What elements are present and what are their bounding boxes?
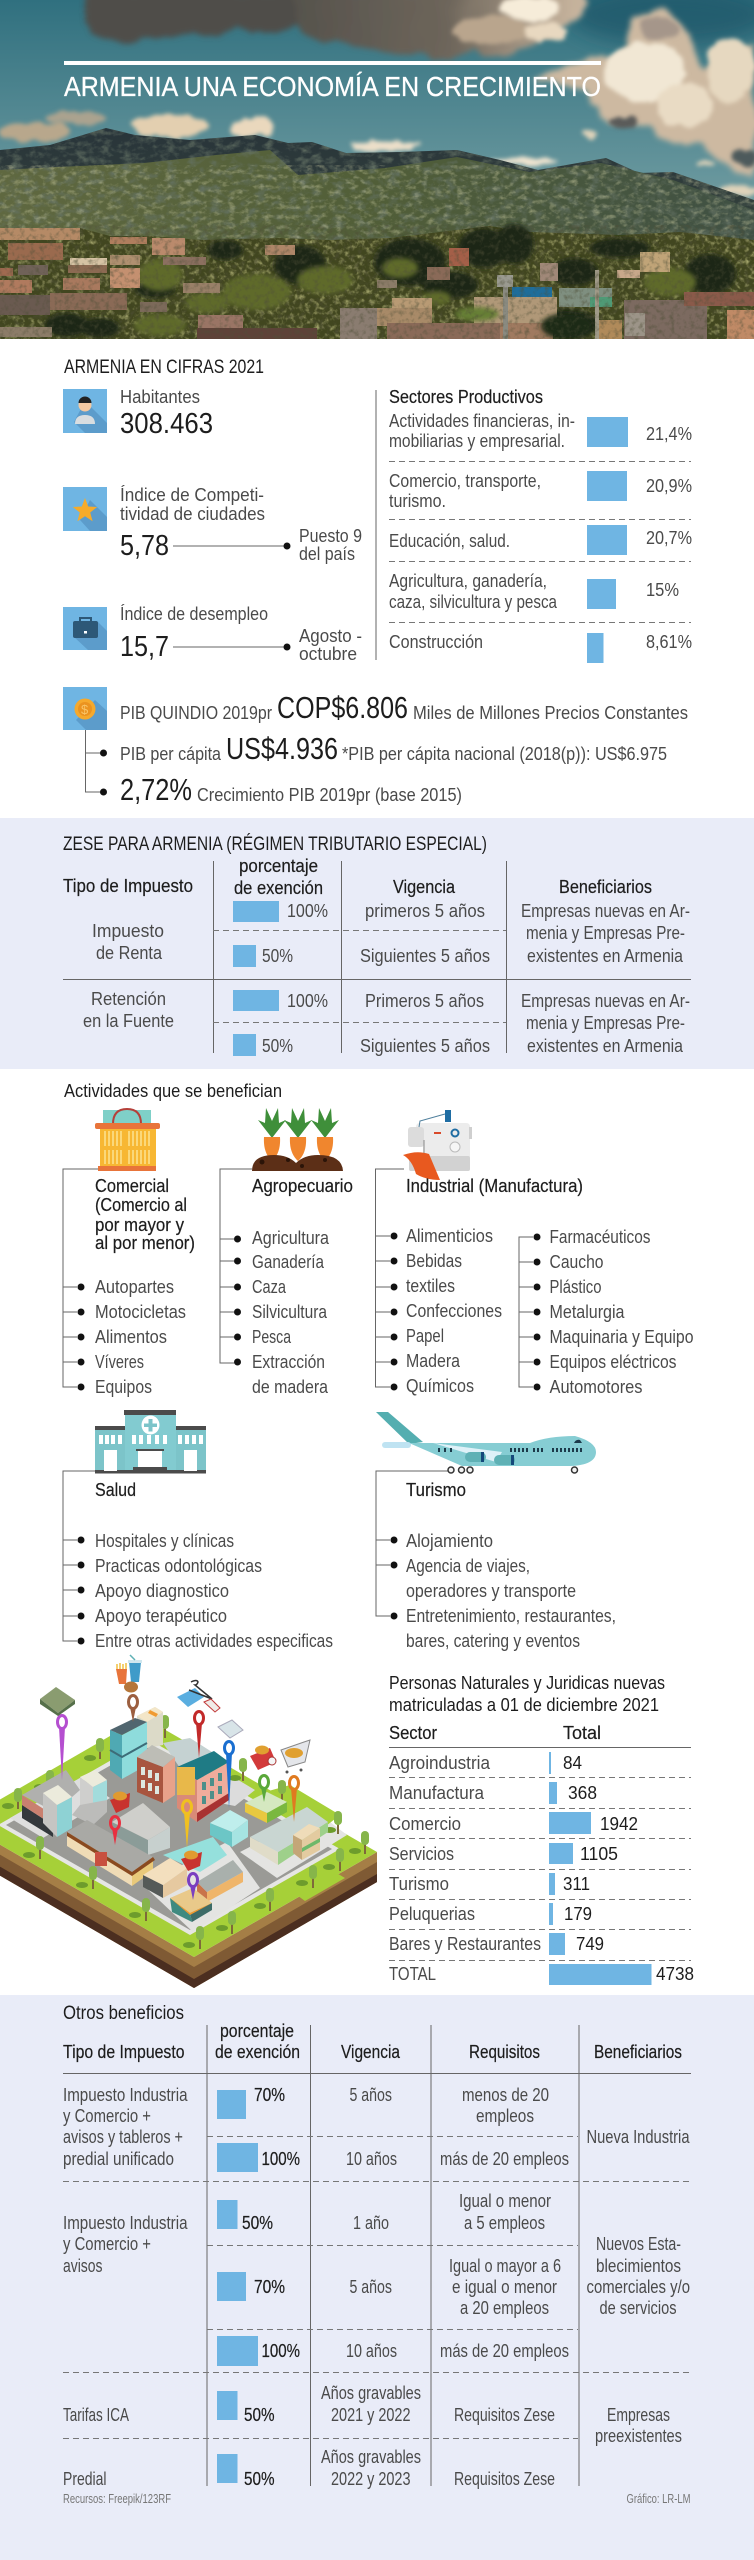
stat: índice de competitividad: tividad de ciudades (120, 504, 265, 524)
rows: Peluquerias (389, 1904, 475, 1924)
panel: turismo: Entretenimiento, restaurantes, (406, 1606, 616, 1626)
table header: Requisitos (469, 2042, 540, 2062)
row group: nuevos establecimientos: comerciales y/o (586, 2277, 690, 2297)
row: impuesto de renta (92, 901, 690, 967)
row group: nueva industria: más de 20 empleos (440, 2149, 569, 2169)
sector row: financieras: 21,4% (646, 424, 692, 444)
panel: industrial: Bebidas (406, 1251, 462, 1271)
sector row: construcción: 8,61% (646, 632, 692, 652)
icon: coin: $ (81, 702, 89, 717)
rows: Agroindustria (389, 1753, 491, 1773)
panel: industrial: Automotores (550, 1377, 642, 1397)
sector row: comercio: Comercio, transporte, (389, 471, 541, 491)
panel: otros beneficios (0, 1995, 754, 2560)
stat block: PIB: US$4.936 (226, 731, 338, 766)
back long roof (163, 1738, 212, 1768)
sector row: comercio: turismo. (389, 491, 446, 511)
credits: Gráfico: LR-LM (626, 2491, 690, 2506)
panel: agropecuario (220, 1108, 353, 1397)
buildings right (377, 248, 754, 339)
row: impuesto de renta: existentes en Armenia (527, 946, 684, 966)
credits: Recursos: Freepik/123RF (63, 2491, 171, 2506)
stat: habitantes (63, 387, 213, 440)
stat: índice de desempleo: 15,7 (120, 631, 169, 663)
panel: ZESE para Armenia: ZESE PARA ARMENIA (RÉGIMEN TRIBUTARIO ESPECIAL) (63, 834, 487, 855)
row group: empresas preexistentes (63, 2383, 682, 2489)
mountains (0, 128, 754, 240)
row group: nueva industria: predial unificado (63, 2149, 174, 2169)
floating icons: money, food, clothes, baskets, cart (40, 1655, 310, 1871)
panel: agropecuario: Agricultura (252, 1228, 330, 1248)
icon: basket (95, 1109, 160, 1171)
icon: coin (63, 687, 107, 730)
soil block (0, 1822, 377, 1988)
panel: industrial: Alimenticios (406, 1226, 493, 1246)
table: personas naturales y jurídicas: Personas Naturales y Juridicas nuevas (389, 1673, 665, 1693)
credits (63, 2491, 690, 2506)
panel: turismo: Turismo (406, 1480, 466, 1500)
rows: 1942 (600, 1814, 638, 1834)
row group: nuevos establecimientos: 70% (254, 2277, 285, 2297)
panel: industrial: Químicos (406, 1376, 474, 1396)
panel: salud: Hospitales y clínicas (95, 1531, 234, 1551)
stat block: PIB: Miles de Millones Precios Constantes (413, 703, 688, 723)
row: impuesto de renta: de Renta (96, 943, 163, 963)
sector row: financieras: Actividades financieras, in- (389, 411, 575, 431)
rows: 84 (563, 1753, 582, 1773)
sector row: comercio: 20,9% (646, 476, 692, 496)
icon: hospital (95, 1410, 206, 1474)
buildings (22, 1707, 328, 1922)
row group: empresas preexistentes: Empresas (607, 2405, 670, 2425)
row group: nueva industria: avisos y tableros + (63, 2127, 183, 2147)
panel: agropecuario: Caza (252, 1277, 287, 1297)
title rule and headline (64, 61, 601, 102)
stat: habitantes: Habitantes (120, 387, 200, 407)
row group: empresas preexistentes: Requisitos Zese (454, 2405, 555, 2425)
sector row: agricultura: caza, silvicultura y pesca (389, 592, 558, 612)
row group: nueva industria: 5 años (350, 2085, 392, 2105)
table header: Vigencia (341, 2042, 401, 2062)
row group: empresas preexistentes: 50% (244, 2405, 274, 2425)
table header: Tipo de Impuesto (63, 2042, 184, 2062)
rows: 749 (576, 1934, 604, 1954)
table header: Beneficiarios (594, 2042, 682, 2062)
sector row: construcción (389, 632, 692, 663)
brick building (137, 1745, 175, 1803)
panel: industrial: Caucho (550, 1252, 604, 1272)
icon: person (63, 389, 107, 433)
row group: empresas preexistentes: Años gravables (321, 2383, 421, 2403)
rows: Bares y Restaurantes (389, 1934, 541, 1954)
row group: nueva industria: 100% (262, 2149, 300, 2169)
table header (63, 856, 652, 898)
panel: sectores productivos (376, 387, 692, 663)
table header: Beneficiarios (559, 877, 652, 897)
panel: comercial (63, 1109, 195, 1397)
panel: turismo: Alojamiento (406, 1531, 493, 1551)
right complex (250, 1807, 328, 1865)
row group: nuevos establecimientos: Igual o mayor a 6 (449, 2256, 561, 2276)
panel: industrial: Madera (406, 1351, 461, 1371)
shopping centre (67, 1820, 155, 1886)
rows: 368 (568, 1783, 597, 1803)
rows: 311 (563, 1874, 590, 1894)
row: retención en la fuente: Retención (91, 989, 166, 1009)
panel: comercial: Motocicletas (95, 1302, 186, 1322)
row group: nuevos establecimientos: 1 año (353, 2213, 389, 2233)
panel: salud: Practicas odontológicas (95, 1556, 262, 1576)
panel: comercial: Alimentos (95, 1327, 167, 1347)
section heading: actividades: Actividades que se benefician (64, 1081, 282, 1101)
table: personas naturales y jurídicas (389, 1673, 694, 1985)
stat: índice de competitividad: Índice de Competi- (120, 485, 264, 505)
panel: turismo: operadores y transporte (406, 1581, 576, 1601)
row group: nuevos establecimientos: 5 años (350, 2277, 392, 2297)
row: retención en la fuente: Empresas nuevas en Ar- (521, 991, 690, 1011)
panel: salud: Salud (95, 1480, 136, 1500)
table header: Vigencia (393, 877, 456, 897)
sector row: agricultura (389, 571, 679, 612)
row group: nuevos establecimientos: 50% (242, 2213, 273, 2233)
icon: carrots (252, 1108, 343, 1171)
stat: índice de competitividad: del país (299, 544, 355, 564)
row group: nuevos establecimientos: Nuevos Esta- (596, 2234, 681, 2254)
panel: salud: Apoyo diagnostico (95, 1581, 229, 1601)
panel: comercial: por mayor y (95, 1215, 184, 1235)
row group: nuevos establecimientos (63, 2191, 690, 2366)
row: retención en la fuente: Primeros 5 años (365, 991, 484, 1011)
row: retención en la fuente (83, 989, 690, 1056)
row group: nueva industria: Impuesto Industria (63, 2085, 188, 2105)
panel: agropecuario: Pesca (252, 1327, 292, 1347)
sector row: educación: Educación, salud. (389, 531, 510, 551)
panel: industrial: Plástico (550, 1277, 602, 1297)
row group: nuevos establecimientos: e igual o menor (452, 2277, 557, 2297)
panel: agropecuario: Agropecuario (252, 1176, 353, 1196)
trees (2, 1715, 369, 1949)
icon: briefcase (63, 607, 107, 650)
rows: 1105 (580, 1844, 618, 1864)
row: retención en la fuente: existentes en Armenia (527, 1036, 684, 1056)
row: impuesto de renta: Siguientes 5 años (360, 946, 490, 966)
panel: industrial: Farmacéuticos (550, 1227, 650, 1247)
row group: nueva industria: 70% (254, 2085, 285, 2105)
row group: empresas preexistentes: 2021 y 2022 (331, 2405, 410, 2425)
sector row: educación (389, 525, 692, 555)
panel: industrial: Equipos eléctricos (550, 1352, 676, 1372)
town (0, 224, 754, 339)
stat: índice de desempleo: octubre (299, 644, 357, 664)
row group: nuevos establecimientos: blecimientos (596, 2256, 681, 2276)
panel: industrial: Papel (406, 1326, 444, 1346)
row: impuesto de renta: 50% (262, 946, 293, 966)
section heading: Armenia en cifras: ARMENIA EN CIFRAS 2021 (64, 357, 264, 378)
row group: nuevos establecimientos: Impuesto Industria (63, 2213, 188, 2233)
clouds (0, 0, 754, 197)
white towers and dark podium (22, 1770, 107, 1837)
tan tower (137, 1707, 163, 1750)
table: personas naturales y jurídicas: Sector (389, 1723, 437, 1743)
table header (63, 2021, 682, 2062)
table header: de exención (215, 2042, 300, 2062)
rows: 179 (564, 1904, 592, 1924)
rows: Comercio (389, 1814, 461, 1834)
panel: agropecuario: Extracción (252, 1352, 325, 1372)
stat: índice de competitividad: 5,78 (120, 530, 169, 562)
buildings left (0, 228, 377, 339)
row group: nueva industria (63, 2085, 690, 2172)
panel: ZESE para Armenia (0, 818, 754, 1069)
row group: empresas preexistentes: Tarifas ICA (63, 2405, 129, 2425)
row group: nueva industria: Nueva Industria (586, 2127, 690, 2147)
panel: agropecuario: de madera (252, 1377, 329, 1397)
sector row: construcción: Construcción (389, 632, 483, 652)
panel: agropecuario: Ganadería (252, 1252, 325, 1272)
centre glass (163, 1837, 227, 1872)
panel: comercial: Autopartes (95, 1277, 174, 1297)
grey office (112, 1803, 170, 1855)
map pins (58, 1696, 298, 1900)
row group: nuevos establecimientos: más de 20 empleos (440, 2341, 569, 2361)
row: impuesto de renta: 100% (287, 901, 328, 921)
table header: porcentaje (239, 856, 318, 876)
stat: índice de desempleo (63, 604, 362, 664)
panel: comercial: Equipos (95, 1377, 152, 1397)
rows: Manufactura (389, 1783, 485, 1803)
row: retención en la fuente: menia y Empresas Pre- (526, 1013, 685, 1033)
panel: industrial: Maquinaria y Equipo (550, 1327, 694, 1347)
stat: índice de competitividad (63, 485, 362, 564)
stat block: PIB: Crecimiento PIB 2019pr (base 2015) (197, 785, 462, 805)
stat: habitantes: 308.463 (120, 408, 213, 440)
rows: Servicios (389, 1844, 454, 1864)
panel: salud: Entre otras actividades especificas (95, 1631, 333, 1651)
row group: empresas preexistentes: 50% (244, 2469, 274, 2489)
panel: industrial: Confecciones (406, 1301, 502, 1321)
row group: nuevos establecimientos: 100% (262, 2341, 300, 2361)
row group: nueva industria: y Comercio + (63, 2106, 151, 2126)
row: retención en la fuente: 100% (287, 991, 328, 1011)
row group: empresas preexistentes: preexistentes (595, 2426, 682, 2446)
panel: turismo (376, 1412, 616, 1651)
row group: nuevos establecimientos: de servicios (600, 2298, 676, 2318)
panel: industrial: Industrial (Manufactura) (406, 1176, 583, 1196)
icon: sewing machine (403, 1110, 472, 1180)
row: impuesto de renta: primeros 5 años (365, 901, 485, 921)
table header: porcentaje (220, 2021, 294, 2041)
stat block: PIB: 2,72% (120, 772, 192, 807)
row: impuesto de renta: Impuesto (92, 921, 164, 941)
row: retención en la fuente: Siguientes 5 años (360, 1036, 490, 1056)
panel: turismo: bares, catering y eventos (406, 1631, 580, 1651)
stat block: PIB: PIB per cápita (120, 744, 222, 764)
sector row: educación: 20,7% (646, 528, 692, 548)
beige block (143, 1858, 187, 1898)
small roof building (197, 1860, 243, 1902)
green store (245, 1792, 287, 1823)
table header: Tipo de Impuesto (63, 876, 193, 896)
row group: nuevos establecimientos: 10 años (346, 2341, 397, 2361)
hero photo: Armenia landscape (0, 0, 754, 339)
row group: nuevos establecimientos: Igual o menor (459, 2191, 551, 2211)
panel: industrial: Metalurgia (550, 1302, 625, 1322)
isometric city illustration (0, 1655, 377, 1988)
panel: comercial: (Comercio al (95, 1195, 187, 1215)
panel: comercial: Víveres (95, 1352, 144, 1372)
rows (389, 1752, 694, 1985)
row: impuesto de renta: menia y Empresas Pre- (526, 923, 685, 943)
panel: turismo: Agencia de viajes, (406, 1556, 530, 1576)
rows: Turismo (389, 1874, 449, 1894)
row group: nueva industria: menos de 20 (462, 2085, 549, 2105)
sector row: financieras: mobiliarias y empresarial. (389, 431, 565, 451)
panel: agropecuario: Silvicultura (252, 1302, 328, 1322)
row group: nueva industria: empleos (476, 2106, 534, 2126)
row group: empresas preexistentes: Predial (63, 2469, 106, 2489)
row group: nuevos establecimientos: avisos (63, 2256, 102, 2276)
teal cube (210, 1810, 248, 1847)
teal glass tower (110, 1718, 147, 1779)
sector row: agricultura: Agricultura, ganadería, (389, 571, 547, 591)
stat block: PIB: COP$6.806 (277, 690, 408, 725)
row group: empresas preexistentes: Requisitos Zese (454, 2469, 555, 2489)
panel: industrial (376, 1110, 694, 1397)
stat block: PIB (63, 687, 688, 807)
table: personas naturales y jurídicas: Total (563, 1723, 601, 1743)
stat block: PIB: *PIB per cápita nacional (2018(p)): US$6.975 (342, 744, 667, 764)
panel: salud (63, 1410, 333, 1651)
row group: nuevos establecimientos: a 20 empleos (460, 2298, 549, 2318)
stat block: PIB: PIB QUINDIO 2019pr (120, 703, 272, 723)
row group: nueva industria: 10 años (346, 2149, 397, 2169)
panel: industrial: textiles (406, 1276, 455, 1296)
icon: airplane (376, 1412, 596, 1473)
front orange shop (170, 1888, 212, 1922)
panel: comercial: al por menor) (95, 1233, 195, 1253)
rows: TOTAL (389, 1964, 436, 1984)
row: impuesto de renta: Empresas nuevas en Ar- (521, 901, 690, 921)
sector row: financieras (389, 411, 692, 451)
row: retención en la fuente: 50% (262, 1036, 293, 1056)
panel: salud: Apoyo terapéutico (95, 1606, 227, 1626)
stat: índice de desempleo: Índice de desempleo (120, 604, 268, 624)
title rule and headline: ARMENIA UNA ECONOMÍA EN CRECIMIENTO (64, 71, 601, 102)
icon: star (63, 487, 107, 531)
panel: sectores productivos: Sectores Productivos (389, 387, 543, 407)
stat: índice de desempleo: Agosto - (299, 626, 362, 646)
sector row: agricultura: 15% (646, 580, 679, 600)
stat: índice de competitividad: Puesto 9 (299, 526, 362, 546)
teal roof building (177, 1751, 229, 1822)
rows: 4738 (656, 1964, 694, 1984)
sector row: comercio (389, 471, 692, 511)
row group: nuevos establecimientos: a 5 empleos (464, 2213, 545, 2233)
row group: nuevos establecimientos: y Comercio + (63, 2234, 151, 2254)
table header: de exención (234, 878, 323, 898)
row group: empresas preexistentes: Años gravables (321, 2447, 421, 2467)
row: retención en la fuente: en la Fuente (83, 1011, 174, 1031)
panel: comercial: Comercial (95, 1176, 169, 1196)
row group: empresas preexistentes: 2022 y 2023 (331, 2469, 410, 2489)
table: personas naturales y jurídicas: matriculadas a 01 de diciembre 2021 (389, 1695, 659, 1715)
panel: otros beneficios: Otros beneficios (63, 2003, 184, 2024)
